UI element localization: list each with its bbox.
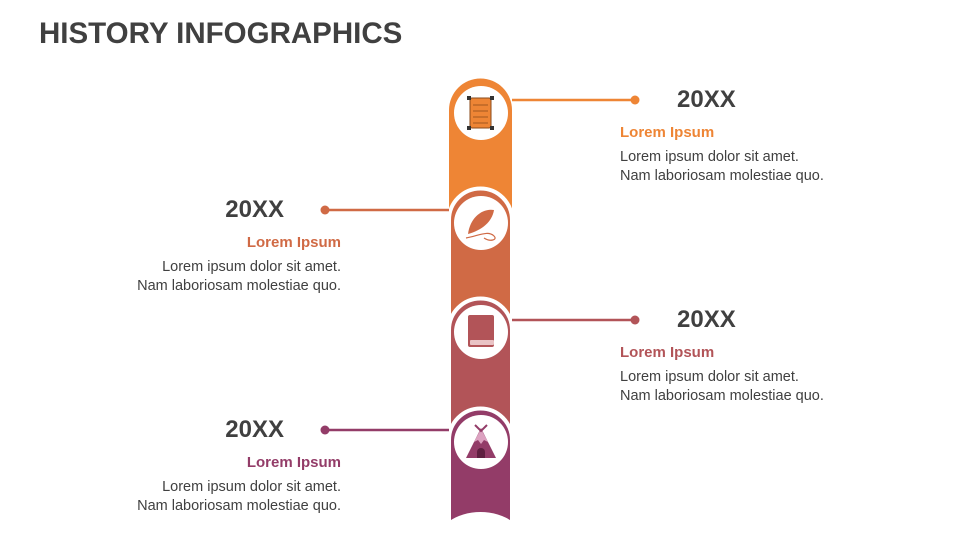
text block 1: Lorem ipsum dolor sit amet. xyxy=(620,149,799,165)
text block 1: 20XX xyxy=(677,86,736,113)
text block 3: Lorem Ipsum xyxy=(620,344,714,361)
icon: book xyxy=(454,305,508,359)
text block 3: 20XX xyxy=(677,306,736,333)
segment 2 xyxy=(320,189,512,340)
title: HISTORY INFOGRAPHICS xyxy=(39,17,402,50)
text block 4: Lorem ipsum dolor sit amet. xyxy=(162,479,341,495)
text block 3: Nam laboriosam molestiae quo. xyxy=(620,388,824,404)
icon: scroll xyxy=(454,86,508,140)
text block 2: Lorem Ipsum xyxy=(247,234,341,251)
text block 4: Nam laboriosam molestiae quo. xyxy=(137,498,341,514)
text block 4 xyxy=(137,416,341,514)
text block 2 xyxy=(137,196,341,294)
text block 3: Lorem ipsum dolor sit amet. xyxy=(620,369,799,385)
text block 2: Lorem ipsum dolor sit amet. xyxy=(162,259,341,275)
icon: quill xyxy=(454,196,508,250)
text block 2: Nam laboriosam molestiae quo. xyxy=(137,278,341,294)
text block 3 xyxy=(620,306,824,404)
segment 3 xyxy=(449,299,640,450)
segment 1 xyxy=(449,79,640,230)
segment 4 xyxy=(320,409,526,540)
text block 2: 20XX xyxy=(225,196,284,223)
text block 1: Lorem Ipsum xyxy=(620,124,714,141)
icon: tent xyxy=(454,415,508,469)
text block 1 xyxy=(620,86,824,184)
text block 4: 20XX xyxy=(225,416,284,443)
text block 1: Nam laboriosam molestiae quo. xyxy=(620,168,824,184)
text block 4: Lorem Ipsum xyxy=(247,454,341,471)
